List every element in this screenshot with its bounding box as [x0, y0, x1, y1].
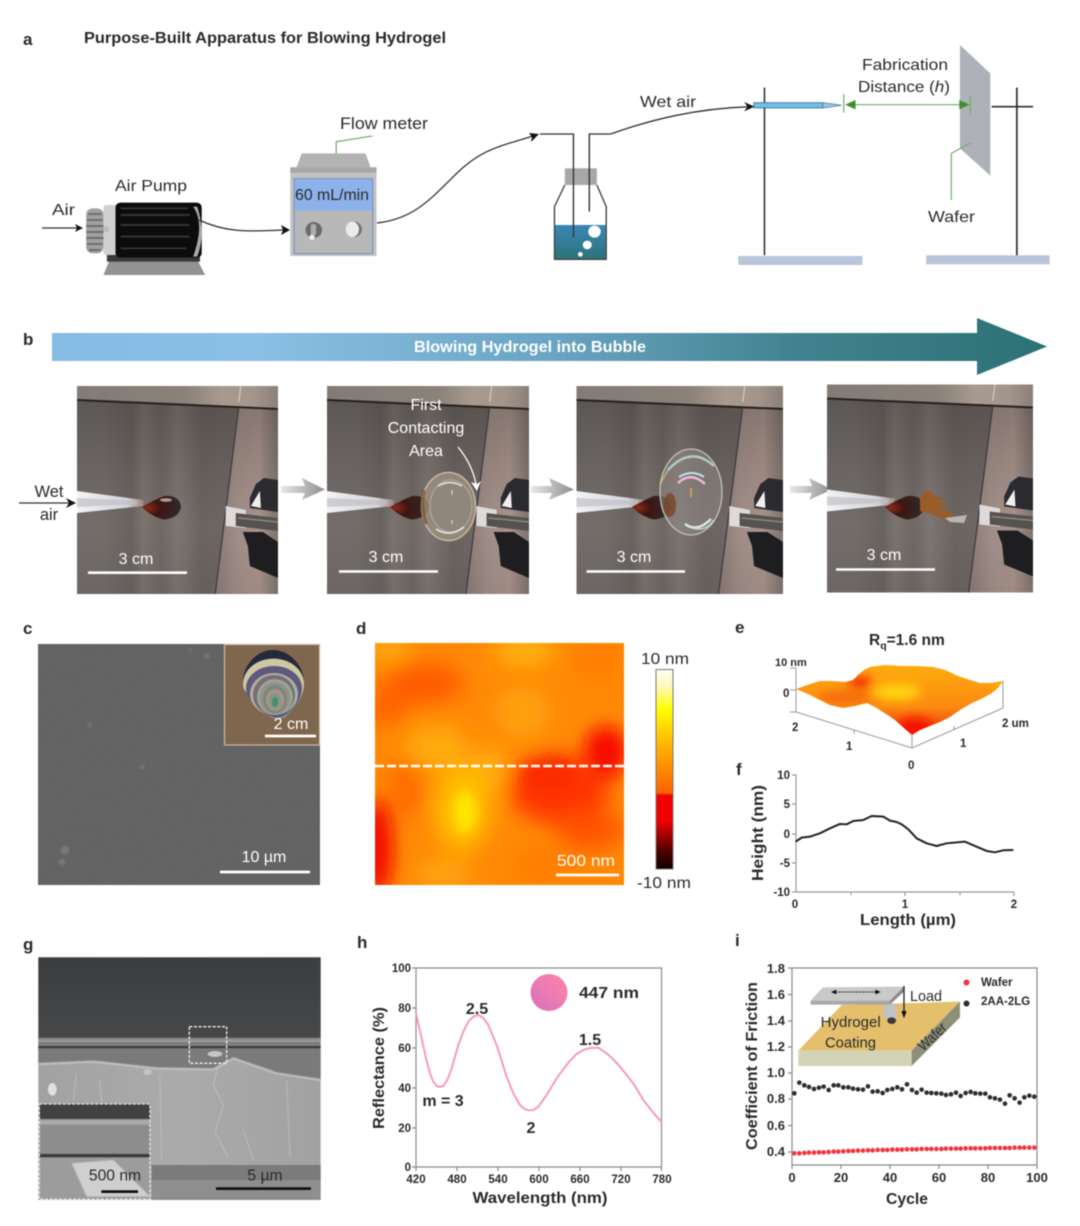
color scale bar: -10 nm: [637, 875, 691, 892]
text: fabrication distance: Fabrication: [862, 57, 948, 74]
tick labels: 40: [883, 1170, 897, 1185]
chart axes: [788, 968, 1037, 1169]
tick labels: 780: [652, 1174, 672, 1186]
panel label f: f: [736, 760, 742, 779]
text: flow meter: Flow meter: [340, 115, 429, 133]
tick labels: [767, 961, 1048, 1185]
panel a: purpose-built apparatus: [23, 30, 1050, 275]
3D axis labels: 2 um: [1002, 718, 1029, 730]
panel i: friction chart: [735, 931, 1048, 1208]
tick labels: 0: [788, 1170, 796, 1185]
tick labels: 1.4: [767, 1013, 786, 1028]
tick labels: 40: [398, 1083, 411, 1095]
text: wet air: Wet air: [640, 94, 697, 111]
icon: wafer on stand: [926, 45, 1050, 264]
wet air inlet label: air: [40, 506, 59, 524]
tick labels: 1.6: [767, 987, 785, 1002]
tick labels: 80: [398, 1003, 411, 1015]
panel label a: a: [23, 30, 33, 49]
tick labels: 60: [932, 1170, 946, 1185]
tick labels: 1.8: [767, 961, 785, 976]
title: Purpose-Built Apparatus for Blowing Hydrogel: [84, 30, 446, 47]
tick labels: 2: [1011, 899, 1017, 911]
panel d: AFM height map: [356, 619, 691, 896]
chart axes: [792, 775, 1014, 896]
SEM micrograph: [38, 644, 320, 885]
air inlet arrow: [42, 202, 83, 232]
color scale bar: 10 nm: [641, 651, 689, 668]
arrow: step 2 to 3: [531, 478, 574, 500]
tick labels: 0: [405, 1162, 411, 1174]
3D surface: [796, 665, 1006, 736]
arrow: step 1 to 2: [281, 478, 325, 500]
panel label d: d: [356, 619, 366, 638]
tick labels: 1: [902, 899, 909, 911]
panel label h: h: [357, 933, 367, 952]
panel label c: c: [23, 619, 32, 638]
3D axis labels: 2: [792, 722, 798, 734]
roughness title: =1.6 nm: [887, 632, 945, 649]
film color swatch and thickness: 447 nm: [579, 985, 639, 1002]
panel f: height profile chart: [736, 760, 1017, 929]
inset: tribometer schematic: [798, 986, 960, 1066]
SEM micrograph: 10 µm: [242, 849, 286, 866]
tick labels: [392, 963, 672, 1186]
tick labels: 5: [784, 799, 791, 811]
tick labels: 660: [570, 1174, 590, 1186]
inset: photo of film: [224, 644, 320, 745]
chart axes: [412, 968, 662, 1171]
tick labels: 420: [406, 1174, 426, 1186]
interference order labels: 2.5: [466, 1001, 488, 1018]
film color swatch and thickness: [530, 974, 639, 1011]
tick labels: -10: [773, 887, 790, 899]
icon: humidifier bottle: [540, 107, 750, 259]
fabrication distance arrow: [844, 94, 970, 115]
tick labels: 20: [398, 1123, 411, 1135]
panel c: SEM surface image: [23, 619, 320, 885]
roughness title: q: [880, 640, 887, 652]
tick labels: -5: [780, 858, 791, 870]
text: flow rate: 60 mL/min: [295, 187, 369, 204]
tick labels: 1.0: [767, 1065, 785, 1080]
tick labels: 60: [398, 1043, 411, 1055]
photo 2: bubble touching wafer: First: [410, 397, 442, 414]
wet air inlet label: Wet: [34, 483, 64, 501]
tick labels: 1.2: [767, 1039, 785, 1054]
3D axis labels: [775, 657, 1029, 772]
panel label e: e: [735, 618, 744, 637]
x axis title: Cycle: [886, 1191, 928, 1208]
tick labels: [773, 770, 1017, 911]
inset: tribometer schematic: Hydrogel: [821, 1015, 881, 1031]
icon: air pump: [86, 203, 205, 275]
AFM map: [374, 642, 625, 886]
connector: flow meter to bottle: [377, 133, 539, 223]
icon: flow meter: [290, 136, 377, 256]
panel label i: i: [735, 931, 740, 950]
tick labels: 480: [447, 1174, 467, 1186]
inset: tribometer schematic: Wafer: [915, 1020, 950, 1055]
photo 2: bubble touching wafer: Contacting: [388, 420, 464, 437]
tick labels: 10: [777, 770, 790, 782]
interference order labels: [422, 1001, 601, 1137]
wet air inlet label: [19, 483, 76, 524]
cross-section micrograph: 5 µm: [247, 1167, 283, 1184]
photo 2: bubble touching wafer: 3 cm: [369, 549, 403, 566]
text: wafer: Wafer: [928, 209, 976, 226]
inset: tribometer schematic: Load: [910, 989, 942, 1005]
cross-section micrograph: [38, 957, 321, 1200]
3D axes: [790, 668, 1003, 748]
tick labels: 100: [1026, 1170, 1048, 1185]
tick labels: 0.8: [767, 1091, 785, 1106]
data series: wafer: [794, 1148, 1034, 1153]
panel h: reflectance chart: [357, 933, 672, 1207]
legend: Wafer: [981, 977, 1013, 989]
color scale bar: [637, 651, 691, 892]
legend: [964, 977, 1030, 1008]
photo 3: fully blown bubble: 3 cm: [617, 549, 651, 566]
panel e: 3D AFM surface: [735, 618, 1029, 772]
tick labels: 80: [981, 1170, 995, 1185]
air inlet arrow: Air: [52, 202, 76, 219]
photo 1: droplet on pipette: [77, 386, 278, 594]
x axis title: Wavelength (nm): [472, 1190, 608, 1207]
tick labels: 0.4: [767, 1144, 786, 1159]
panel label g: g: [23, 935, 33, 954]
text: fabrication distance: [858, 57, 950, 96]
tick labels: 100: [392, 963, 411, 975]
3D axis labels: 1: [846, 741, 853, 753]
interference order labels: 2: [527, 1120, 536, 1137]
tick labels: 0: [784, 829, 790, 841]
3D axis labels: 10 nm: [775, 657, 807, 669]
x axis title: Length (µm): [860, 912, 956, 929]
inset: photo of film: 2 cm: [274, 716, 308, 733]
cross-section micrograph: 500 nm: [89, 1167, 141, 1184]
tick labels: 0: [792, 899, 798, 911]
tick labels: 540: [488, 1174, 508, 1186]
tick labels: 0.6: [767, 1118, 785, 1133]
AFM map: 500 nm: [557, 853, 615, 870]
roughness title: R: [869, 632, 880, 649]
data series: 2AA-2LG: [794, 1083, 1034, 1104]
photo 1: droplet on pipette: 3 cm: [119, 551, 153, 568]
process arrow: [52, 318, 1047, 375]
reflectance curve: [416, 1013, 662, 1122]
tick labels: 720: [611, 1174, 631, 1186]
y axis title: Reflectance (%): [371, 1007, 388, 1129]
interference order labels: 1.5: [579, 1032, 601, 1049]
arrow: step 3 to 4: [790, 478, 832, 500]
photo 2: bubble touching wafer: [327, 386, 529, 594]
photo 3: fully blown bubble: [576, 386, 783, 594]
panel label b: b: [23, 330, 33, 349]
inset: tribometer schematic: Coating: [825, 1036, 876, 1052]
tick labels: 20: [834, 1170, 848, 1185]
3D axis labels: 1: [960, 738, 967, 750]
process arrow: Blowing Hydrogel into Bubble: [414, 339, 646, 356]
3D axis labels: 0: [783, 688, 789, 700]
photo 4: ruptured film: 3 cm: [867, 547, 901, 564]
panel g: cross-section SEM: [23, 935, 321, 1200]
y axis title: Coefficient of Friction: [744, 982, 761, 1150]
panel b: blowing hydrogel into bubble: [19, 318, 1047, 594]
y axis title: Height (nm): [750, 785, 767, 881]
photo 4: ruptured film: [827, 384, 1033, 592]
text: fabrication distance: Distance ( h): [858, 79, 950, 96]
legend: 2AA-2LG: [981, 996, 1030, 1008]
icon: stand with nozzle: [738, 88, 862, 265]
height profile curve: [796, 816, 1013, 852]
photo 2: bubble touching wafer: Area: [409, 443, 443, 460]
connector: pump to flow meter: [199, 220, 290, 235]
interference order labels: m = 3: [422, 1093, 464, 1110]
tick labels: 600: [529, 1174, 549, 1186]
text: air pump: Air Pump: [115, 178, 187, 195]
3D axis labels: 0: [908, 760, 914, 772]
